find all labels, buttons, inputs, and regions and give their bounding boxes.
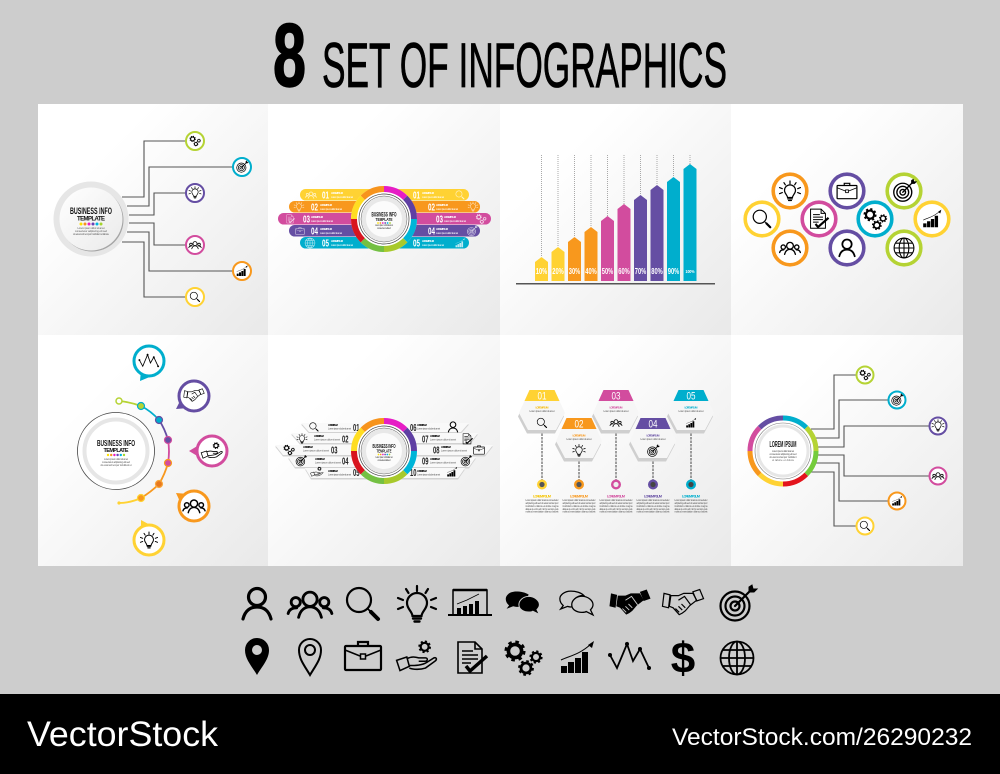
- column captions: nostrud exercitation ullamco laboris: [636, 510, 670, 514]
- row numbers: 05: [353, 468, 360, 479]
- main circle: consectetur adipiscing elit sed: [75, 230, 108, 233]
- column captions: adipiscing elit sed do eiusmod tempor: [674, 502, 708, 505]
- hexagon 05: Lorem ipsum dolor sit amet: [678, 410, 704, 413]
- icon: solid handshake: [609, 590, 651, 615]
- icon: outline map pin: [299, 639, 321, 675]
- icon: group: [186, 236, 204, 254]
- row captions: [303, 423, 467, 476]
- right bars: 01: [413, 190, 420, 202]
- icon: lightbulb: [398, 586, 436, 622]
- right bars: LOREM IPSUM: [444, 215, 456, 219]
- row captions: LOREM IPSUM: [417, 469, 428, 473]
- row captions: LOREM IPSUM: [430, 434, 441, 438]
- column captions: [526, 494, 708, 514]
- icon set: row one: [243, 585, 757, 622]
- icon: search circle: [745, 202, 779, 236]
- icon: group circle: [773, 231, 807, 265]
- column captions: incididunt ut labore et dolore magna: [674, 505, 708, 508]
- icon: growth chart: [561, 641, 594, 673]
- left bars: 05: [322, 238, 329, 250]
- connector lines: [811, 375, 929, 526]
- column captions: incididunt ut labore et dolore magna: [562, 505, 596, 508]
- hexagon 03: Lorem ipsum dolor sit amet: [604, 410, 629, 413]
- main circle: Lorem ipsum dolor sit amet: [78, 227, 105, 230]
- row numbers: 01: [353, 423, 360, 434]
- centre ring: Lorem ipsum dolor sit amet: [376, 456, 393, 459]
- icon: briefcase: [345, 642, 381, 670]
- column captions: incididunt ut labore et dolore magna: [526, 505, 559, 508]
- left bars: 01: [322, 190, 329, 202]
- hexagon 05: 05: [686, 390, 696, 402]
- panel: radial connector diagram: [38, 104, 268, 335]
- bar 50%: [601, 216, 614, 281]
- left bars: Lorem ipsum dolor sit amet: [331, 195, 353, 199]
- bar 80%: [650, 185, 664, 281]
- column captions: incididunt ut labore et dolore magna: [600, 505, 633, 508]
- row captions: LOREM IPSUM: [417, 423, 428, 427]
- bar 10%: 10%: [536, 267, 547, 276]
- icon: lightbulb circle: [773, 174, 807, 208]
- main circle: BUSINESS INFO: [70, 206, 112, 216]
- column captions: Lorem ipsum dolor sit amet consectetur: [562, 499, 596, 502]
- column captions: LOREM IPSUM: [644, 494, 662, 498]
- hexagon 01: Lorem ipsum dolor sit amet: [530, 410, 555, 413]
- centre ring: consectetur elit sed: [378, 459, 391, 462]
- icon: document check: [458, 642, 487, 673]
- row captions: LOREM IPSUM: [314, 434, 325, 438]
- main circle: Lorem ipsum dolor sit amet: [104, 458, 128, 461]
- column captions: adipiscing elit sed do eiusmod tempor: [562, 502, 596, 505]
- icon: globe circle: [887, 231, 921, 265]
- icon: globe: [720, 642, 754, 674]
- icon: chart: [233, 262, 251, 280]
- panel: ring connector diagram: [731, 335, 963, 566]
- icon: group: [930, 468, 946, 484]
- row captions: Lorem ipsum dolor sit amet: [417, 428, 440, 430]
- column captions: nostrud exercitation ullamco laboris: [674, 510, 708, 514]
- bubble: hand with gear: [189, 436, 227, 466]
- row captions: LOREM IPSUM: [303, 445, 314, 449]
- icon: outline speech bubbles: [560, 591, 593, 615]
- panel: coloured bars with centre ring: [268, 104, 500, 335]
- hexagon 04: LOREM IPSUM: [646, 434, 660, 438]
- icon: gears: [506, 642, 542, 675]
- centre ring: LOREM IPSUM: [770, 440, 797, 449]
- icon: search: [186, 288, 204, 306]
- icon: group: [288, 592, 332, 617]
- row captions: Lorem ipsum dolor sit amet: [417, 474, 440, 476]
- column captions: LOREM IPSUM: [607, 494, 625, 498]
- bar 70%: 70%: [635, 267, 646, 276]
- left bars: Lorem ipsum dolor sit amet: [311, 219, 333, 223]
- timeline dots: [538, 481, 695, 488]
- centre ring: [342, 177, 426, 261]
- column captions: nostrud exercitation ullamco laboris: [526, 510, 559, 514]
- hexagon 01: [518, 390, 565, 434]
- hexagon 03: LOREM IPSUM: [610, 406, 623, 410]
- row numbers: 02: [342, 434, 349, 446]
- column captions: Lorem ipsum dolor sit amet consectetur: [600, 499, 633, 502]
- icon: solid speech bubbles: [506, 592, 539, 614]
- bar 30%: [568, 237, 581, 281]
- icon: target circle: [887, 174, 921, 208]
- row numbers: 09: [422, 456, 429, 468]
- bubble: zigzag: [134, 346, 164, 381]
- dashed connectors: [542, 430, 691, 484]
- column captions: adipiscing elit sed do eiusmod tempor: [636, 502, 670, 505]
- timeline arc: [116, 398, 172, 505]
- icon: search: [856, 518, 874, 534]
- row numbers: [331, 423, 440, 479]
- right bars: [384, 189, 491, 250]
- icon: document circle: [802, 202, 836, 236]
- right bars: Lorem ipsum dolor sit amet: [436, 207, 458, 211]
- column captions: nostrud exercitation ullamco laboris: [600, 510, 633, 514]
- row captions: Lorem ipsum dolor sit amet: [303, 450, 329, 452]
- column captions: aliqua ut enim ad minim veniam quis: [562, 508, 596, 511]
- left bars: 04: [311, 226, 318, 238]
- centre ring: do eiusmod tempor incididunt: [770, 456, 797, 459]
- bar 50%: 50%: [602, 267, 613, 276]
- row captions: LOREM IPSUM: [430, 457, 441, 461]
- row shadows: [275, 424, 493, 480]
- centre ring: Lorem ipsum dolor sit amet: [772, 450, 794, 453]
- centre ring: consectetur elit sed: [377, 227, 392, 230]
- panel: hexagon timeline: [500, 335, 731, 566]
- row captions: Lorem ipsum dolor sit amet: [430, 438, 456, 442]
- icon: dollar: $: [671, 634, 695, 683]
- footer image id: VectorStock.com/26290232: [672, 724, 972, 751]
- panel: timeline arc with speech bubbles: [38, 335, 268, 566]
- centre ring: BUSINESS INFO: [372, 444, 396, 450]
- row captions: LOREM IPSUM: [441, 445, 452, 449]
- right bars: Lorem ipsum dolor sit amet: [422, 195, 444, 199]
- rows: [275, 423, 493, 478]
- column captions: LOREM IPSUM: [682, 494, 700, 498]
- title: 8: [273, 6, 306, 106]
- icon: solid map pin: [245, 638, 269, 675]
- bar 90%: 90%: [668, 267, 679, 276]
- bar 60%: [618, 204, 630, 281]
- column captions: incididunt ut labore et dolore magna: [636, 505, 670, 508]
- row numbers: 06: [410, 423, 417, 434]
- right bars: LOREM IPSUM: [436, 203, 448, 207]
- column captions: Lorem ipsum dolor sit amet consectetur: [526, 499, 559, 502]
- icon: chart: [888, 492, 906, 510]
- row captions: Lorem ipsum dolor sit amet: [328, 428, 351, 430]
- icon: gears: [856, 366, 874, 384]
- hexagon 02: LOREM IPSUM: [572, 434, 586, 438]
- left bars: Lorem ipsum dolor sit amet: [320, 231, 342, 235]
- footer brand: VectorStock: [27, 715, 219, 754]
- icon: target: [233, 158, 251, 176]
- column captions: LOREM IPSUM: [570, 494, 588, 498]
- right bars: 04: [428, 226, 435, 238]
- hexagon 01: 01: [538, 390, 546, 402]
- hexagon 02: [555, 418, 602, 462]
- row captions: LOREM IPSUM: [315, 457, 326, 461]
- bar 60%: 60%: [618, 267, 630, 276]
- row captions: LOREM IPSUM: [328, 423, 339, 427]
- icon set: row two: [245, 634, 754, 683]
- main circle: BUSINESS INFO: [97, 438, 135, 448]
- left bars: [278, 189, 384, 250]
- left bars: LOREM IPSUM: [320, 227, 332, 231]
- icon: magnifier: [347, 588, 378, 619]
- left bars: Lorem ipsum dolor sit amet: [331, 243, 353, 247]
- row captions: Lorem ipsum dolor sit amet: [315, 462, 341, 464]
- left bars: LOREM IPSUM: [331, 191, 343, 195]
- bar 80%: 80%: [651, 267, 663, 276]
- bubble: handshake: [176, 381, 209, 411]
- icon: bulb: [930, 418, 946, 434]
- icon: laptop chart: [448, 590, 492, 615]
- left bars: 02: [311, 202, 318, 214]
- row captions: Lorem ipsum dolor sit amet: [441, 450, 467, 452]
- row numbers: 08: [433, 446, 440, 456]
- bar 100%: 100%: [686, 269, 694, 274]
- row captions: LOREM IPSUM: [328, 469, 339, 473]
- bar 70%: [634, 195, 647, 281]
- right bars: 03: [436, 214, 443, 226]
- main circle: [54, 182, 128, 256]
- icon: chart circle: [915, 202, 949, 236]
- bar 30%: 30%: [569, 267, 580, 276]
- centre ring: Lorem ipsum dolor sit amet: [375, 224, 393, 227]
- row captions: Lorem ipsum dolor sit amet: [430, 462, 456, 464]
- bubble: group: [176, 491, 209, 521]
- column captions: aliqua ut enim ad minim veniam quis: [526, 508, 559, 511]
- right bars: LOREM IPSUM: [422, 191, 434, 195]
- icon: outline handshake: [662, 590, 704, 615]
- left bars: LOREM IPSUM: [311, 215, 323, 219]
- bar 40%: 40%: [585, 267, 597, 276]
- row numbers: 10: [410, 468, 417, 479]
- column captions: aliqua ut enim ad minim veniam quis: [636, 508, 670, 511]
- right bars: LOREM IPSUM: [436, 227, 448, 231]
- hexagon 05: LOREM IPSUM: [684, 406, 698, 410]
- right bars: LOREM IPSUM: [422, 239, 434, 243]
- main circle: [78, 412, 154, 490]
- centre ring: BUSINESS INFO: [372, 212, 397, 218]
- column captions: LOREM IPSUM: [533, 494, 551, 498]
- footer band: [0, 694, 1000, 774]
- main circle: TEMPLATE: [77, 216, 105, 222]
- bar 90%: [667, 177, 680, 281]
- dotted guide lines: [542, 155, 690, 257]
- column captions: aliqua ut enim ad minim veniam quis: [600, 508, 633, 511]
- centre ring: [736, 404, 830, 498]
- panel: arrow bar chart: [500, 104, 731, 335]
- bubble: lightbulb: [134, 520, 164, 555]
- bar 100%: [684, 164, 696, 281]
- hexagon 04: 04: [648, 418, 658, 430]
- icon: zigzag line: [608, 642, 651, 670]
- chart baseline: [516, 283, 715, 284]
- right bars: Lorem ipsum dolor sit amet: [422, 243, 444, 247]
- column captions: Lorem ipsum dolor sit amet consectetur: [636, 499, 670, 502]
- left bars: Lorem ipsum dolor sit amet: [320, 207, 342, 211]
- icon: user: [243, 588, 271, 619]
- hexagon 03: 03: [612, 390, 620, 402]
- hexagon 01: LOREM IPSUM: [536, 406, 549, 410]
- row numbers: 03: [331, 446, 338, 456]
- right bars: Lorem ipsum dolor sit amet: [444, 219, 466, 223]
- centre ring: ut labore et dolore: [772, 459, 795, 462]
- column captions: adipiscing elit sed do eiusmod tempor: [600, 502, 633, 505]
- right bars: 05: [413, 238, 420, 250]
- centre ring: consectetur adipiscing elit sed: [770, 453, 797, 456]
- row captions: Lorem ipsum dolor sit amet: [328, 474, 351, 476]
- icon: briefcase circle: [830, 174, 864, 208]
- centre ring: [342, 409, 426, 493]
- main circle: do eiusmod tempor incididunt ut labore: [73, 233, 110, 236]
- icon: target: [720, 585, 757, 620]
- centre ring: TEMPLATE: [376, 448, 392, 454]
- panel: ten slanted rows with centre ring: [268, 335, 500, 566]
- bar 20%: 20%: [552, 267, 564, 276]
- icon: user circle: [830, 231, 864, 265]
- hexagon 05: [667, 390, 714, 434]
- hexagon 03: [592, 390, 639, 434]
- hexagon 04: Lorem ipsum dolor sit amet: [640, 438, 666, 441]
- bar icons: [287, 191, 486, 248]
- icon: hand with gear: [397, 641, 436, 671]
- hexagon 02: Lorem ipsum dolor sit amet: [566, 438, 592, 441]
- centre ring: TEMPLATE: [376, 217, 392, 222]
- main circle: consectetur adipiscing elit sed: [102, 461, 131, 464]
- icon: target: [888, 392, 906, 408]
- icon: bulb: [186, 184, 204, 202]
- main circle: do eiusmod tempor incididunt ut: [100, 464, 132, 467]
- title: [273, 6, 727, 106]
- column captions: nostrud exercitation ullamco laboris: [562, 510, 596, 514]
- row numbers: 07: [422, 434, 429, 446]
- column captions: Lorem ipsum dolor sit amet consectetur: [674, 499, 708, 502]
- left bars: LOREM IPSUM: [320, 203, 332, 207]
- row captions: Lorem ipsum dolor sit amet: [314, 438, 340, 442]
- icon: gears: [186, 132, 204, 150]
- icon: gears circle: [858, 202, 892, 236]
- column captions: aliqua ut enim ad minim veniam quis: [674, 508, 708, 511]
- bar 10%: [535, 257, 548, 281]
- bar 40%: [584, 227, 598, 281]
- row numbers: 04: [342, 456, 349, 468]
- row icons: [284, 422, 484, 476]
- hexagon 02: 02: [574, 418, 584, 430]
- column captions: adipiscing elit sed do eiusmod tempor: [526, 502, 559, 505]
- main circle: TEMPLATE: [104, 448, 129, 454]
- left bars: LOREM IPSUM: [331, 239, 343, 243]
- right bars: 02: [428, 202, 435, 214]
- right bars: Lorem ipsum dolor sit amet: [436, 231, 458, 235]
- panel: circle icon cluster: [731, 104, 963, 335]
- left bars: 03: [303, 214, 310, 226]
- connector lines: [122, 141, 233, 297]
- bar 20%: [552, 247, 564, 281]
- hexagon 04: [629, 418, 676, 462]
